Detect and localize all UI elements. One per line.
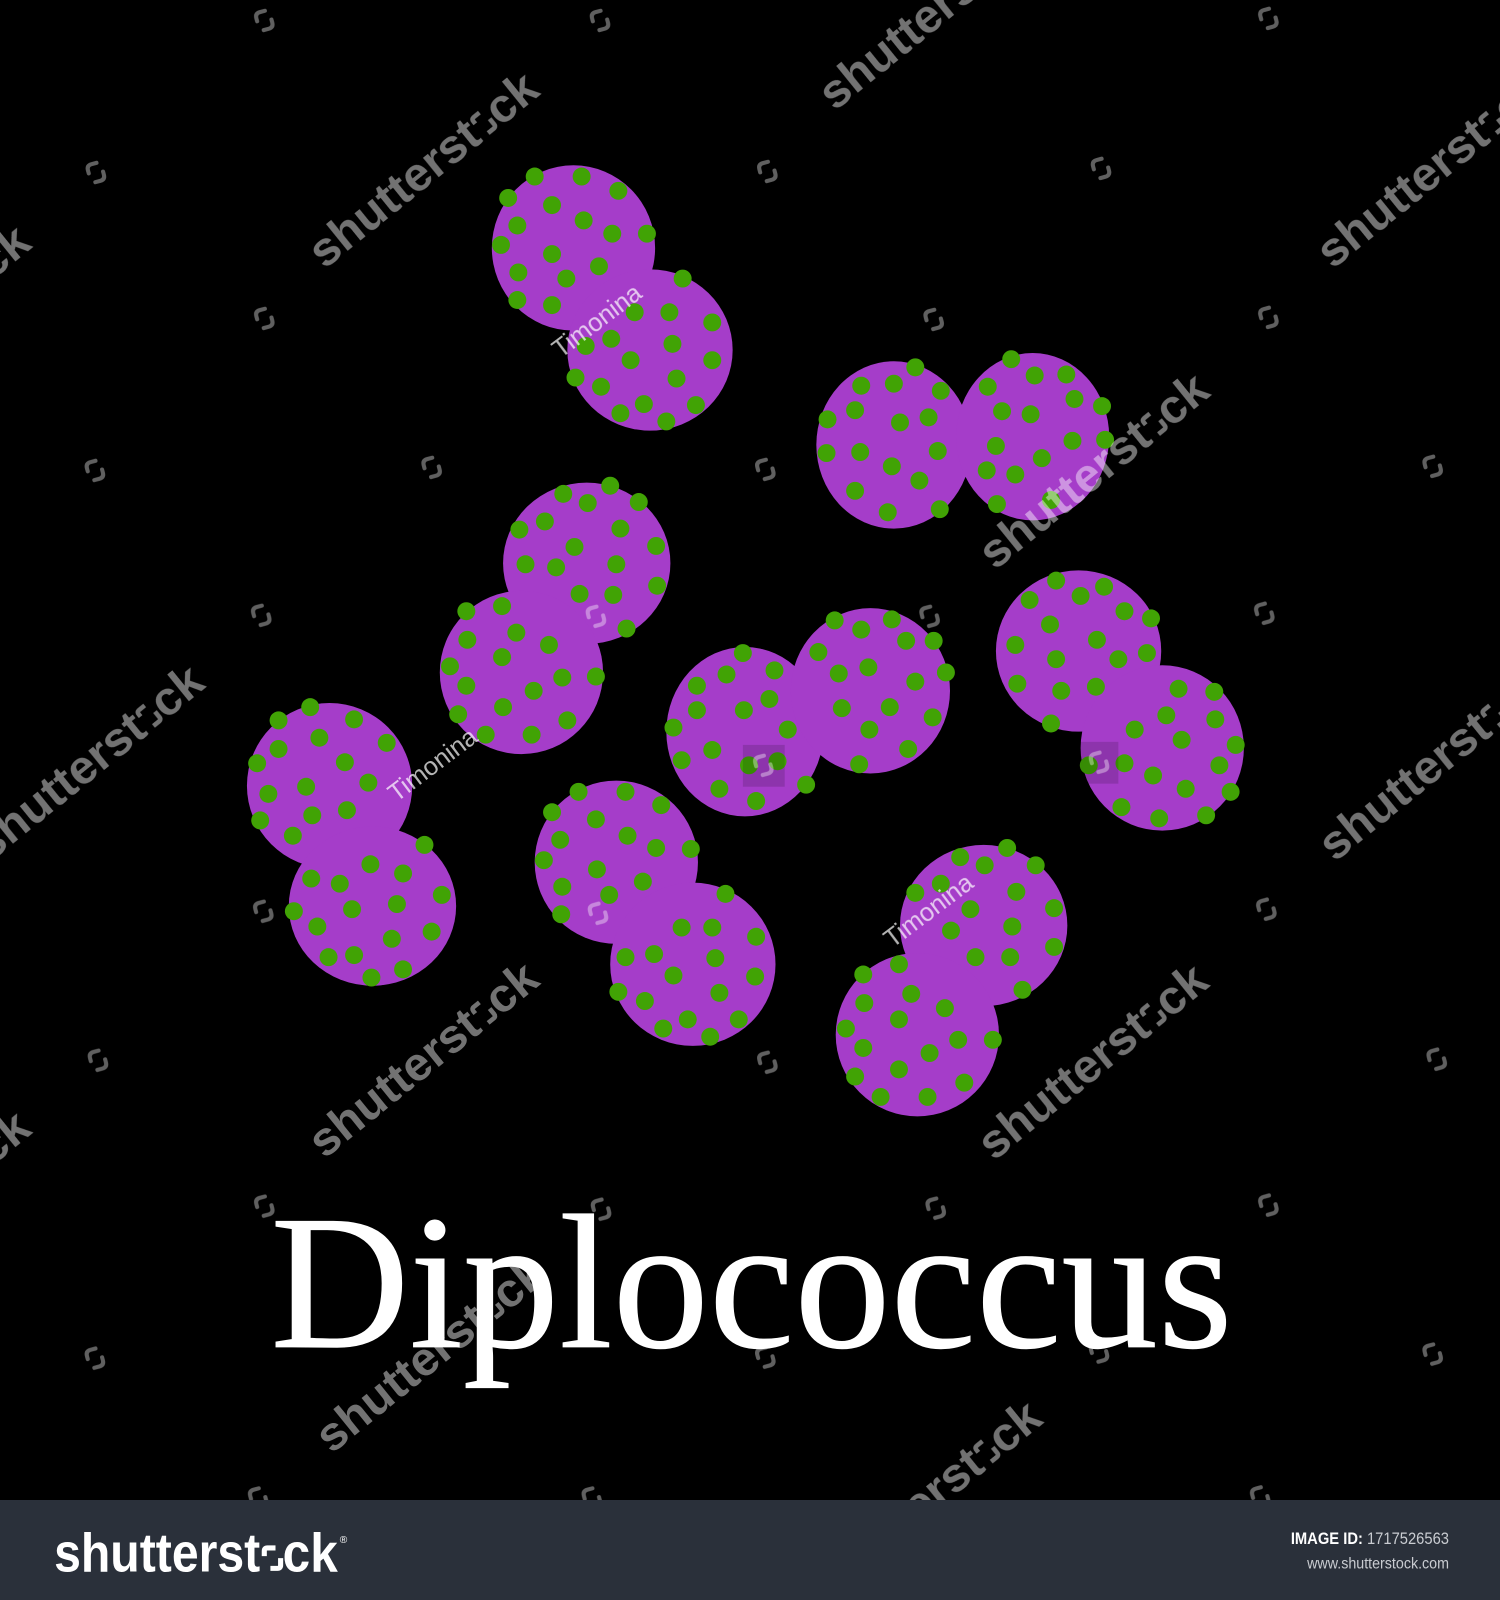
watermark: shutterstock wordmarks: ck	[474, 61, 549, 135]
footer bar	[0, 1500, 1500, 1600]
diplococcus pair 1	[492, 165, 733, 431]
watermark: shutterstock wordmarks: ck	[474, 950, 549, 1025]
diplococcus pair 5	[996, 570, 1245, 831]
watermark: shutterstock wordmarks: shutterst	[305, 1292, 497, 1462]
watermark: shutterstock wordmarks: shutterst	[1308, 701, 1500, 870]
watermark: contributor names: Timonina	[383, 722, 484, 807]
watermark: contributor names: Timonina	[879, 868, 979, 953]
footer logo: ®	[340, 1535, 348, 1546]
diplococcus pair 6	[247, 698, 456, 987]
footer logo: shutterst	[54, 1521, 260, 1583]
title: Diplococcus	[270, 1177, 1233, 1389]
diplococcus pair 4	[664, 608, 955, 816]
watermark: shutterstock wordmarks: shutterst	[1306, 108, 1498, 277]
image id: IMAGE ID: 1717526563	[1291, 1530, 1449, 1548]
watermark: contributor names: Timonina	[547, 278, 648, 364]
watermark tiles	[743, 742, 1118, 787]
watermark: shutterstock wordmarks: ck	[481, 1245, 556, 1320]
website url: www.shutterstock.com	[1306, 1555, 1449, 1572]
watermark: shutterstock wordmarks: shutterst	[967, 1000, 1160, 1169]
watermark: contributor names	[383, 278, 979, 953]
watermark: shutterstock wordmarks: ck	[977, 1389, 1052, 1463]
diplococcus pair 8	[836, 839, 1067, 1116]
footer logo: ck	[283, 1521, 338, 1583]
watermark: shutterstock wordmarks: ck	[139, 653, 214, 728]
watermark: shutterstock wordmarks: shutterst	[298, 108, 490, 277]
watermark: shutterstock wordmarks: shutterst	[968, 409, 1161, 578]
watermark: shutterstock wordmarks: ck	[1143, 952, 1218, 1027]
diplococcus pair 7	[535, 781, 776, 1046]
watermark: shutterstock wordmarks: ck	[1144, 362, 1219, 436]
watermark: shutterstock wordmarks: shutterst	[298, 998, 490, 1167]
diplococcus pair 3	[440, 477, 670, 754]
diplococcus pair 2	[816, 350, 1114, 529]
